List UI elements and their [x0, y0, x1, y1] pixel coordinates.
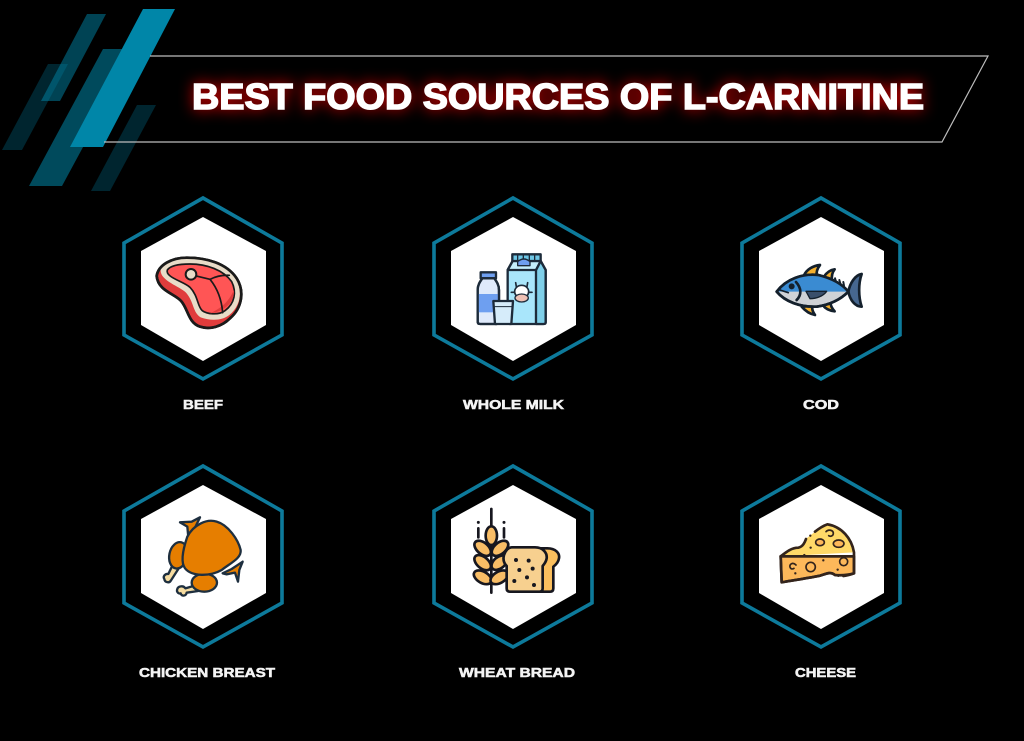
title banner outline — [104, 56, 988, 142]
hexagon frame: chicken breast — [124, 466, 282, 647]
icon: wheat and bread — [471, 509, 559, 593]
hexagon panel: whole milk — [451, 217, 576, 361]
hexagon panel: cheese — [759, 485, 884, 629]
hexagon panel: cod — [759, 217, 884, 361]
title: BEST FOOD SOURCES OF L-CARNITINE — [192, 76, 924, 117]
hexagon panel: chicken breast — [141, 485, 266, 629]
label: wheat bread: WHEAT BREAD — [459, 665, 575, 680]
title: BEST FOOD SOURCES OF L-CARNITINE — [192, 76, 924, 117]
hexagon frame: beef — [124, 198, 282, 379]
icon: roast chicken — [164, 517, 243, 596]
label: chicken breast: CHICKEN BREAST — [139, 665, 275, 680]
card: whole milk — [434, 198, 592, 412]
card: cheese — [742, 466, 900, 680]
icon: milk carton, bottle and glass — [478, 254, 546, 324]
card: cod — [742, 198, 900, 412]
hexagon panel: beef — [141, 217, 266, 361]
decorative slanted bars — [2, 9, 175, 191]
label: whole milk: WHOLE MILK — [463, 397, 565, 412]
hexagon panel: wheat bread — [451, 485, 576, 629]
label: cod: COD — [803, 397, 839, 412]
label: cheese: CHEESE — [795, 665, 856, 680]
icon: cheese wedge — [781, 524, 854, 582]
label: beef: BEEF — [183, 397, 223, 412]
hexagon frame: cod — [742, 198, 900, 379]
hexagon frame: cheese — [742, 466, 900, 647]
hexagon frame: wheat bread — [434, 466, 592, 647]
icon: beef steak — [157, 258, 241, 328]
hexagon frame: whole milk — [434, 198, 592, 379]
icon: cod fish — [777, 265, 862, 315]
card: beef — [124, 198, 282, 412]
card: wheat bread — [434, 466, 592, 680]
card: chicken breast — [124, 466, 282, 680]
